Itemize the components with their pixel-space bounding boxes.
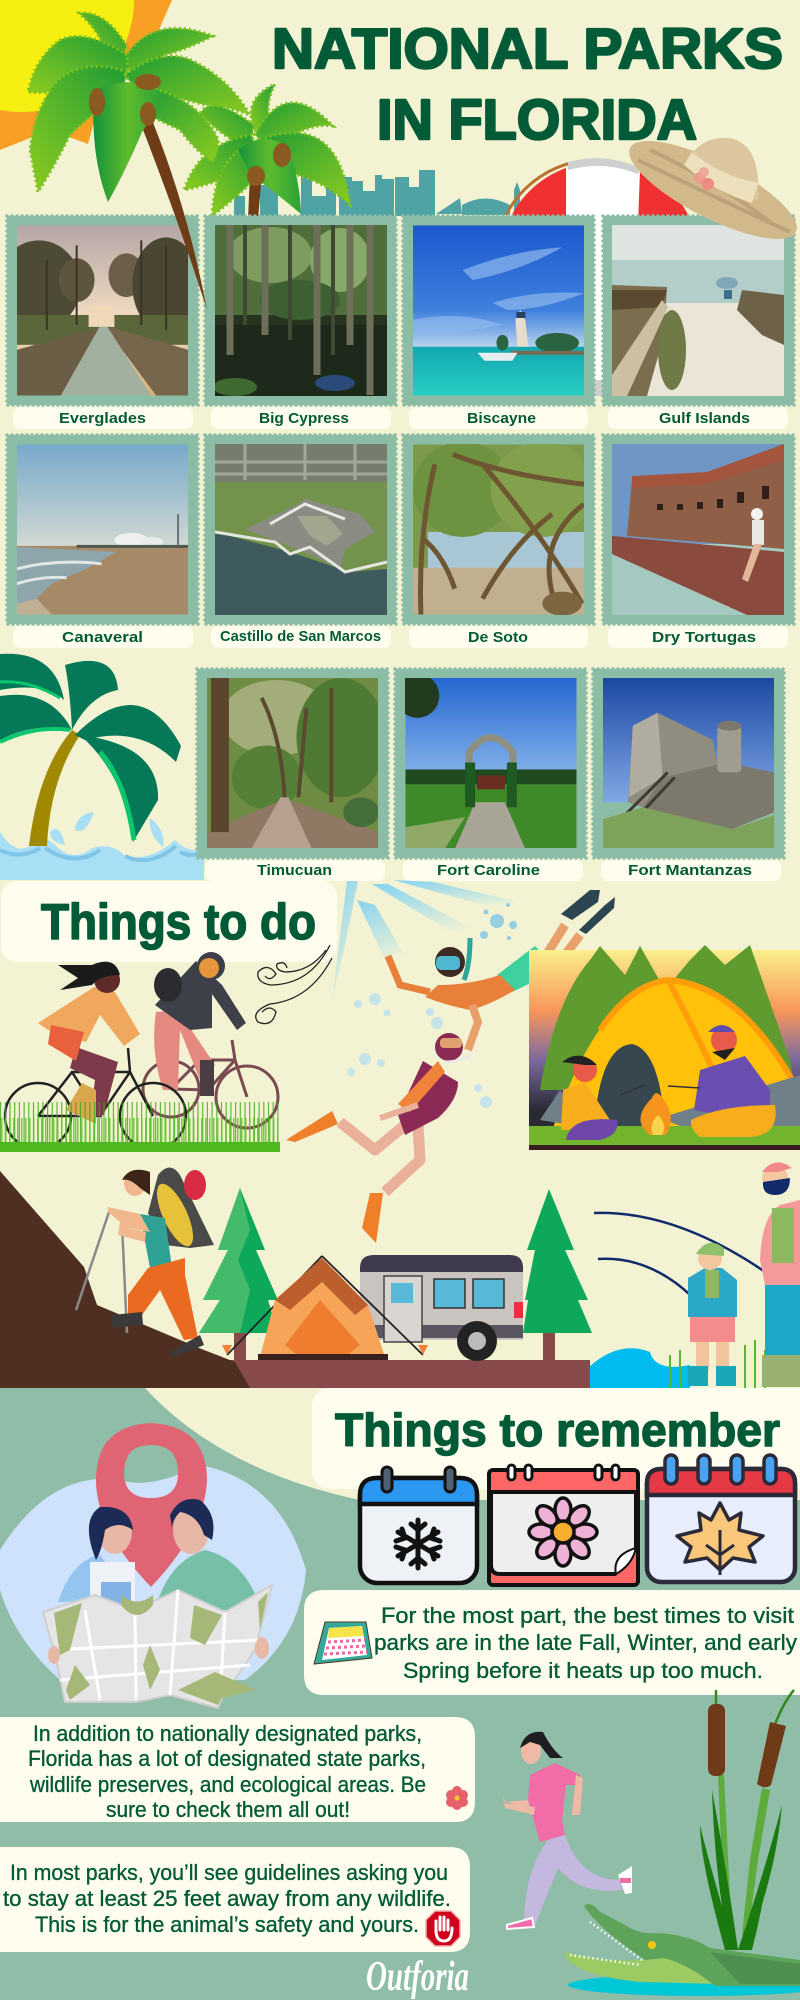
icon: stop hand	[426, 1911, 460, 1946]
callout: best times to visit	[304, 1590, 800, 1695]
icon: desk calendar	[314, 1622, 372, 1664]
callout: wildlife distance: This is for the animal’s safety and yours.	[35, 1912, 419, 1937]
label: Canaveral	[62, 629, 143, 646]
icon: sun	[0, 0, 172, 150]
heading: things to remember	[312, 1388, 800, 1489]
callout: wildlife distance: In most parks, you’ll see guidelines asking you	[10, 1860, 448, 1885]
illustration: alligator in water	[564, 1904, 800, 1996]
label: Everglades	[59, 410, 146, 427]
illustration: cattails and reeds	[700, 1690, 794, 1950]
icon: winter calendar	[360, 1467, 477, 1583]
panel: De Soto	[403, 435, 594, 648]
illustration: hill and ground	[0, 1171, 690, 1388]
illustration: dark palm tree	[0, 654, 181, 846]
title: NATIONAL PARKS	[272, 17, 783, 81]
label	[409, 407, 588, 429]
callout: state parks: sure to check them all out!	[106, 1797, 350, 1822]
illustration: camping scene	[529, 945, 800, 1150]
back bicycle	[143, 1040, 278, 1128]
illustration: camper van	[360, 1255, 523, 1361]
panel: Everglades	[0, 216, 200, 429]
callout: wildlife distance: to stay at least 25 feet away from any wildlife.	[3, 1886, 451, 1911]
heading: things to remember: Things to remember	[335, 1404, 780, 1456]
photo: twisted trees on shore	[413, 444, 584, 615]
panel: Dry Tortugas	[603, 435, 794, 648]
photo: beach with rocket launch site	[17, 444, 188, 614]
callout: best times to visit: For the most part, the best times to visit	[381, 1603, 794, 1628]
panel: Fort Mantanzas	[593, 669, 784, 881]
label: Fort Mantanzas	[628, 862, 752, 879]
label	[13, 626, 193, 648]
front bicycle	[5, 1048, 186, 1149]
panel: Fort Caroline	[395, 669, 586, 881]
illustration: skyline	[234, 170, 520, 216]
panel: Big Cypress	[205, 216, 396, 429]
photo: forest trail	[207, 678, 378, 848]
callout: state parks: wildlife preserves, and ecological areas. Be	[29, 1772, 426, 1797]
panel: Castillo de San Marcos	[205, 435, 396, 648]
panel: Timucuan	[197, 669, 388, 881]
label	[409, 626, 588, 648]
front rider	[38, 962, 140, 1124]
illustration: tent	[222, 1256, 428, 1360]
illustration: ocean with waves	[0, 812, 204, 880]
label	[205, 860, 385, 881]
callout: state parks: In addition to nationally designated parks,	[33, 1721, 422, 1746]
callout: wildlife distance	[0, 1847, 470, 1952]
photo: boardwalk at sunset	[17, 226, 188, 396]
illustration: scuba diver	[286, 993, 492, 1243]
illustration: cyclists	[0, 952, 280, 1149]
label	[13, 407, 193, 429]
photo: brick fort and moat	[612, 444, 784, 615]
heading: things to do: Things to do	[41, 894, 316, 950]
illustration: hiker	[76, 1168, 214, 1358]
grass	[0, 1127, 280, 1147]
label: Big Cypress	[259, 410, 349, 427]
logo: Outforia: Outforia	[366, 1954, 469, 2000]
icon: sun hat	[617, 123, 800, 257]
heading: things to do	[1, 881, 337, 962]
label: Fort Caroline	[437, 862, 540, 879]
label	[608, 407, 788, 429]
illustration: sun rays under water	[332, 880, 515, 1000]
photo: aerial fort	[215, 444, 387, 615]
label: De Soto	[468, 629, 528, 646]
panel: Gulf Islands	[603, 216, 794, 429]
callout: state parks	[0, 1717, 475, 1822]
illustration: people fishing	[594, 1162, 800, 1388]
icon: autumn calendar	[647, 1455, 795, 1582]
photo: lighthouse on turquoise water	[413, 226, 584, 396]
icon: flower	[529, 1498, 597, 1566]
icon: spring calendar	[489, 1465, 638, 1585]
photo: cypress swamp	[215, 225, 387, 396]
callout: state parks: Florida has a lot of designated state parks,	[28, 1746, 426, 1771]
photo: stone fort	[603, 678, 774, 848]
illustration: pine trees	[199, 1188, 592, 1362]
label: Gulf Islands	[659, 410, 750, 427]
label	[403, 860, 583, 881]
label	[211, 407, 391, 429]
panel: Biscayne	[403, 216, 594, 429]
photo: fort gate arch	[405, 678, 576, 848]
callout: best times to visit: Spring before it heats up too much.	[403, 1658, 763, 1683]
icon: lifebuoy	[500, 158, 700, 396]
illustration: snorkeler	[388, 890, 615, 1050]
section background: remember	[0, 1388, 800, 2000]
icon: pink flower	[446, 1786, 468, 1810]
label	[608, 626, 788, 648]
back rider	[154, 952, 246, 1096]
photo: sandy beach path	[612, 225, 784, 396]
title: IN FLORIDA	[377, 88, 697, 152]
illustration: big palm tree	[28, 13, 250, 310]
illustration: runner	[502, 1732, 632, 1929]
icon: wind swirl	[256, 945, 332, 1024]
panel: Canaveral	[7, 435, 198, 648]
label: Dry Tortugas	[652, 629, 756, 646]
label: Castillo de San Marcos	[220, 628, 381, 645]
illustration: small palm tree	[184, 84, 350, 220]
title	[272, 17, 783, 152]
icon: maple leaf	[677, 1503, 763, 1575]
label: Timucuan	[257, 862, 332, 879]
callout: best times to visit: parks are in the late Fall, Winter, and early	[374, 1630, 797, 1655]
label: Biscayne	[467, 410, 536, 427]
icon: snowflake	[396, 1520, 440, 1568]
illustration: couple with map	[0, 1423, 306, 1708]
label	[601, 860, 781, 881]
